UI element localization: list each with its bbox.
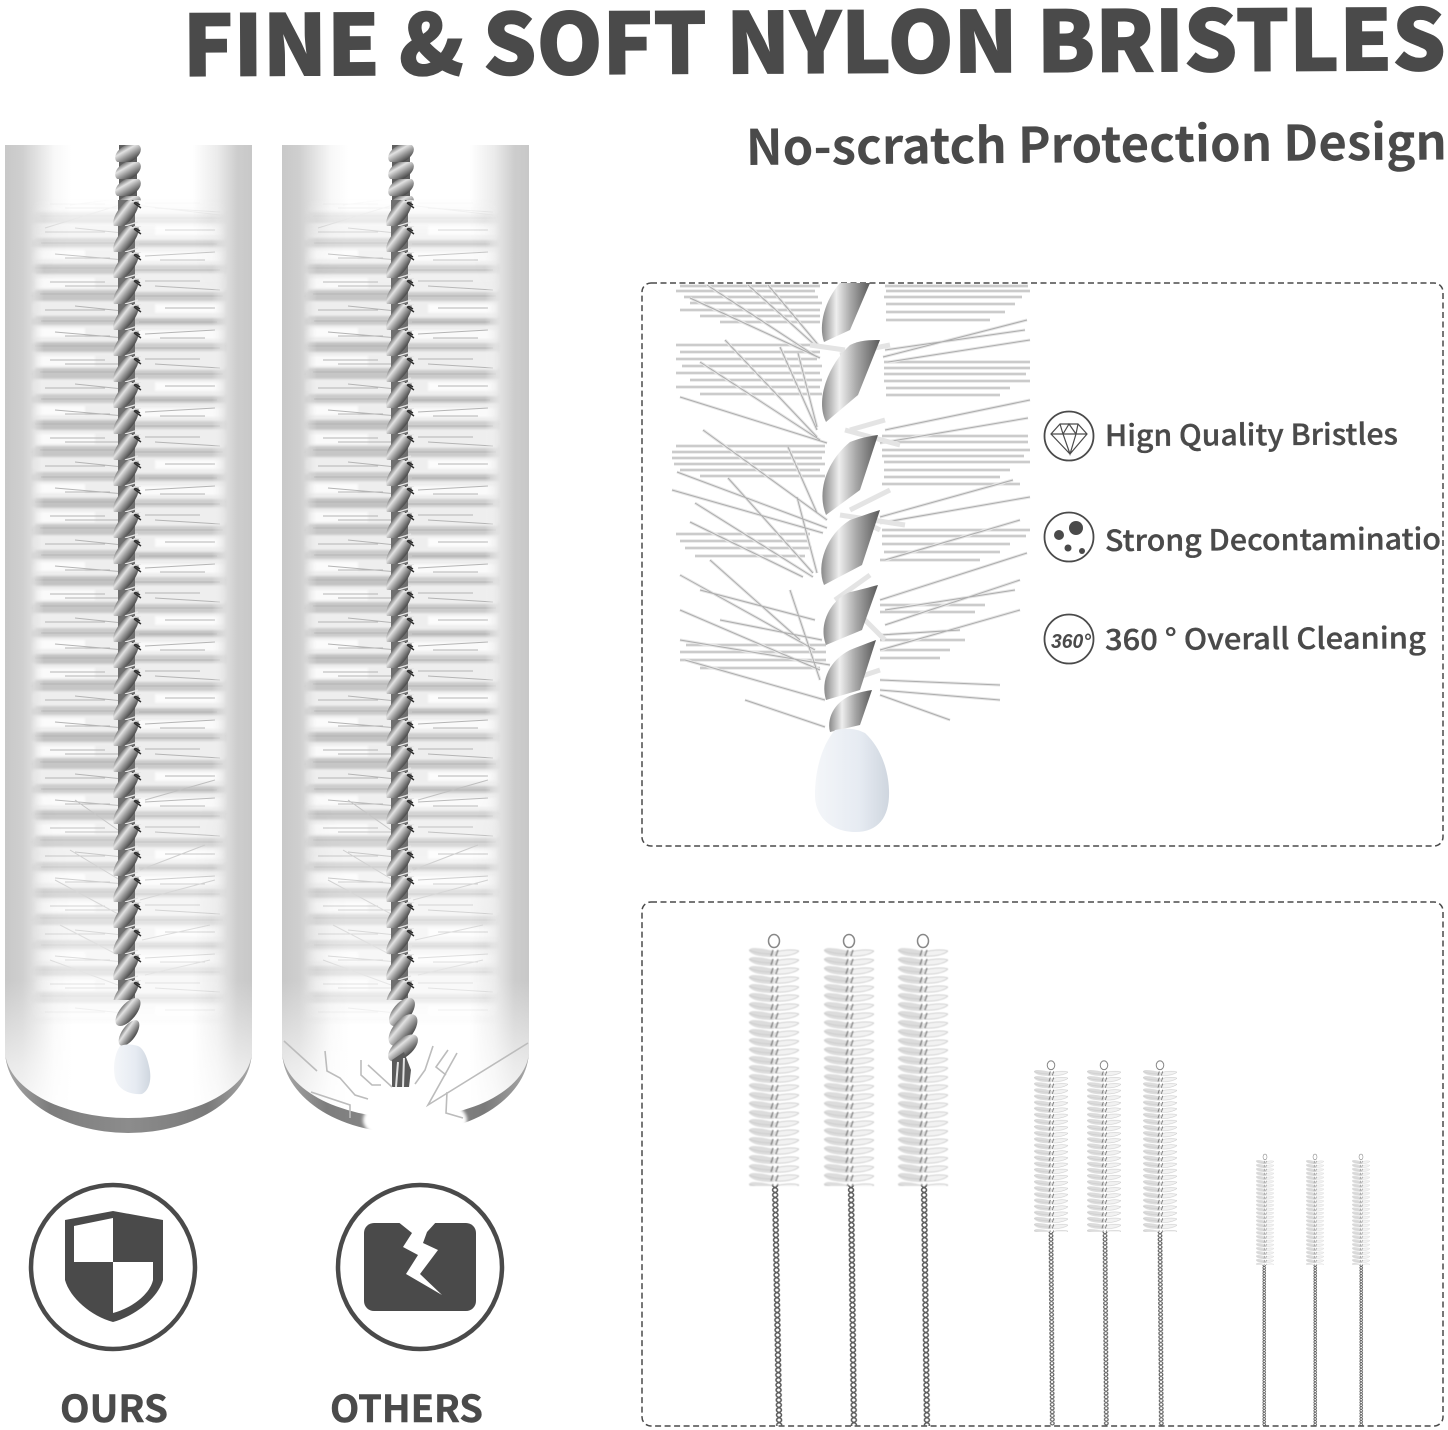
thick bent wire end xyxy=(383,993,423,1087)
icon: 360 degrees xyxy=(1044,614,1094,664)
bristles: others xyxy=(303,198,501,1028)
close-up rounded tip xyxy=(815,729,889,832)
icon: diamond xyxy=(1044,412,1094,460)
glass tube: ours xyxy=(5,145,252,1135)
glass tube: others xyxy=(282,145,529,1135)
rounded brush tip: ours xyxy=(114,1044,150,1094)
icon: cracked surface xyxy=(338,1185,502,1349)
panel: other brush in cracked tube xyxy=(282,145,529,1144)
close-up twisted wire xyxy=(821,283,880,732)
panel: brush size set xyxy=(642,902,1443,1426)
twisted wire: others xyxy=(381,145,419,1000)
icon: 360 degrees: 360° xyxy=(1051,631,1092,653)
feature: strong decontamination xyxy=(1044,512,1441,562)
close-up bristles xyxy=(672,285,1030,727)
icon: shield xyxy=(31,1185,195,1349)
panel border xyxy=(642,283,1443,846)
feature: high quality bristles xyxy=(1044,411,1398,460)
feature: 360 overall cleaning xyxy=(1044,614,1426,664)
text: Hign Quality Bristles xyxy=(1105,411,1398,455)
small brushes xyxy=(1256,1154,1370,1426)
wire end: ours xyxy=(111,994,145,1049)
panel: our brush in glass tube xyxy=(5,145,252,1135)
icon: dirt particles xyxy=(1044,512,1094,562)
text: 360 ° Overall Cleaning xyxy=(1105,615,1426,659)
twisted wire: ours xyxy=(108,145,146,1000)
tube rim: ours xyxy=(5,1050,252,1133)
shatter gap xyxy=(363,1096,467,1144)
medium brushes xyxy=(1034,1061,1177,1426)
subtitle: No-scratch Protection Design xyxy=(746,103,1447,180)
tube rim: others xyxy=(282,1050,529,1133)
bristles: ours xyxy=(30,198,228,1028)
text: Strong Decontaminatio xyxy=(1105,516,1441,560)
panel: bristle close-up xyxy=(642,283,1443,846)
crack lines xyxy=(284,1041,528,1118)
panel border xyxy=(642,902,1443,1426)
large brushes xyxy=(749,934,948,1426)
